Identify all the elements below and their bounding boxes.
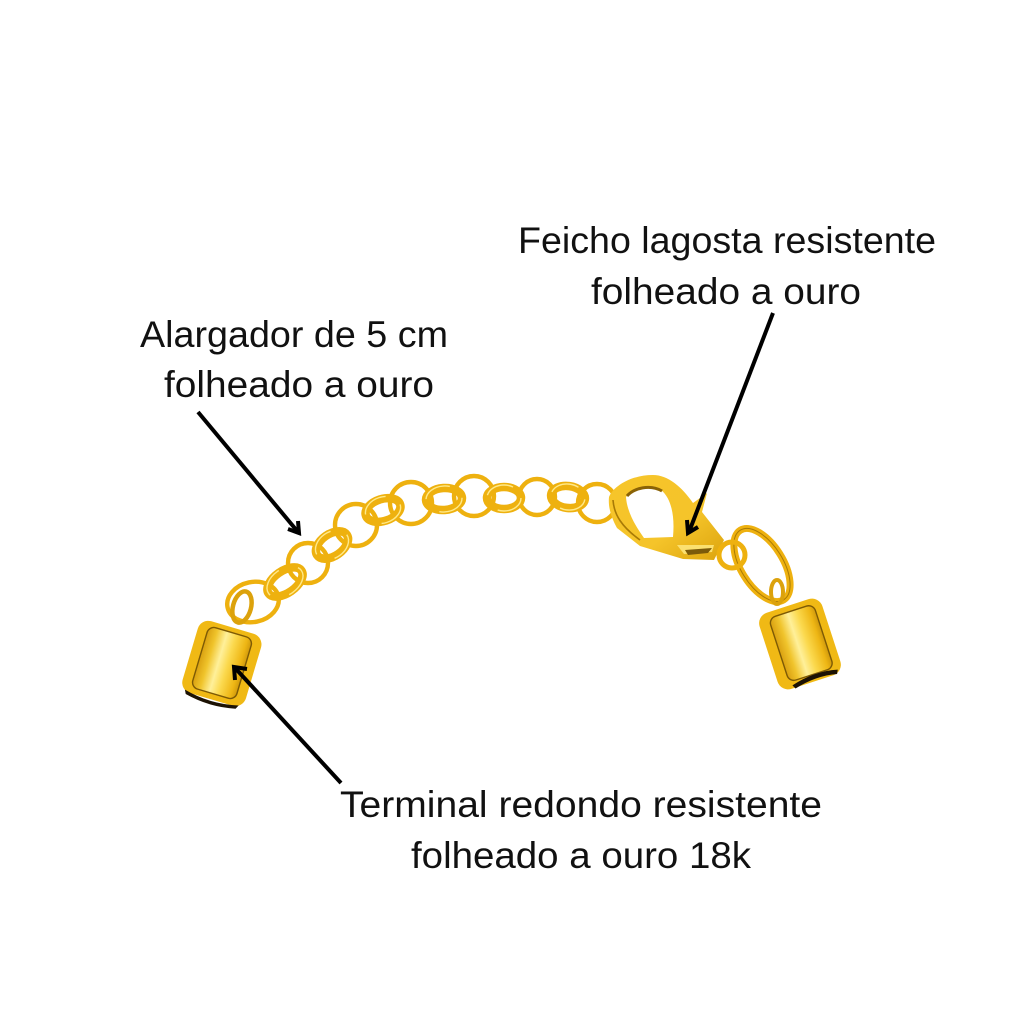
label: extender: folheado a ouro: [164, 364, 434, 405]
label: terminal: Terminal redondo resistente: [340, 784, 822, 825]
flat thick links: [262, 484, 586, 602]
icon: lobster clasp: [609, 475, 724, 560]
arrow: clasp: [687, 313, 773, 533]
label: terminal: [340, 784, 822, 876]
label: terminal: folheado a ouro 18k: [411, 835, 752, 876]
icon: right round terminal: [756, 596, 844, 693]
thin round links: [223, 476, 616, 627]
label: clasp: [518, 220, 936, 312]
label: extender: Alargador de 5 cm: [140, 314, 448, 355]
link highlights: [261, 482, 587, 604]
label: extender: [140, 314, 448, 405]
arrow: terminal: [234, 667, 341, 783]
right chain links: [719, 519, 802, 611]
label: clasp: Feicho lagosta resistente: [518, 220, 936, 261]
chain: [223, 476, 616, 627]
arrow: extender: [198, 412, 299, 533]
label: clasp: folheado a ouro: [591, 271, 861, 312]
icon: left round terminal: [178, 618, 264, 714]
